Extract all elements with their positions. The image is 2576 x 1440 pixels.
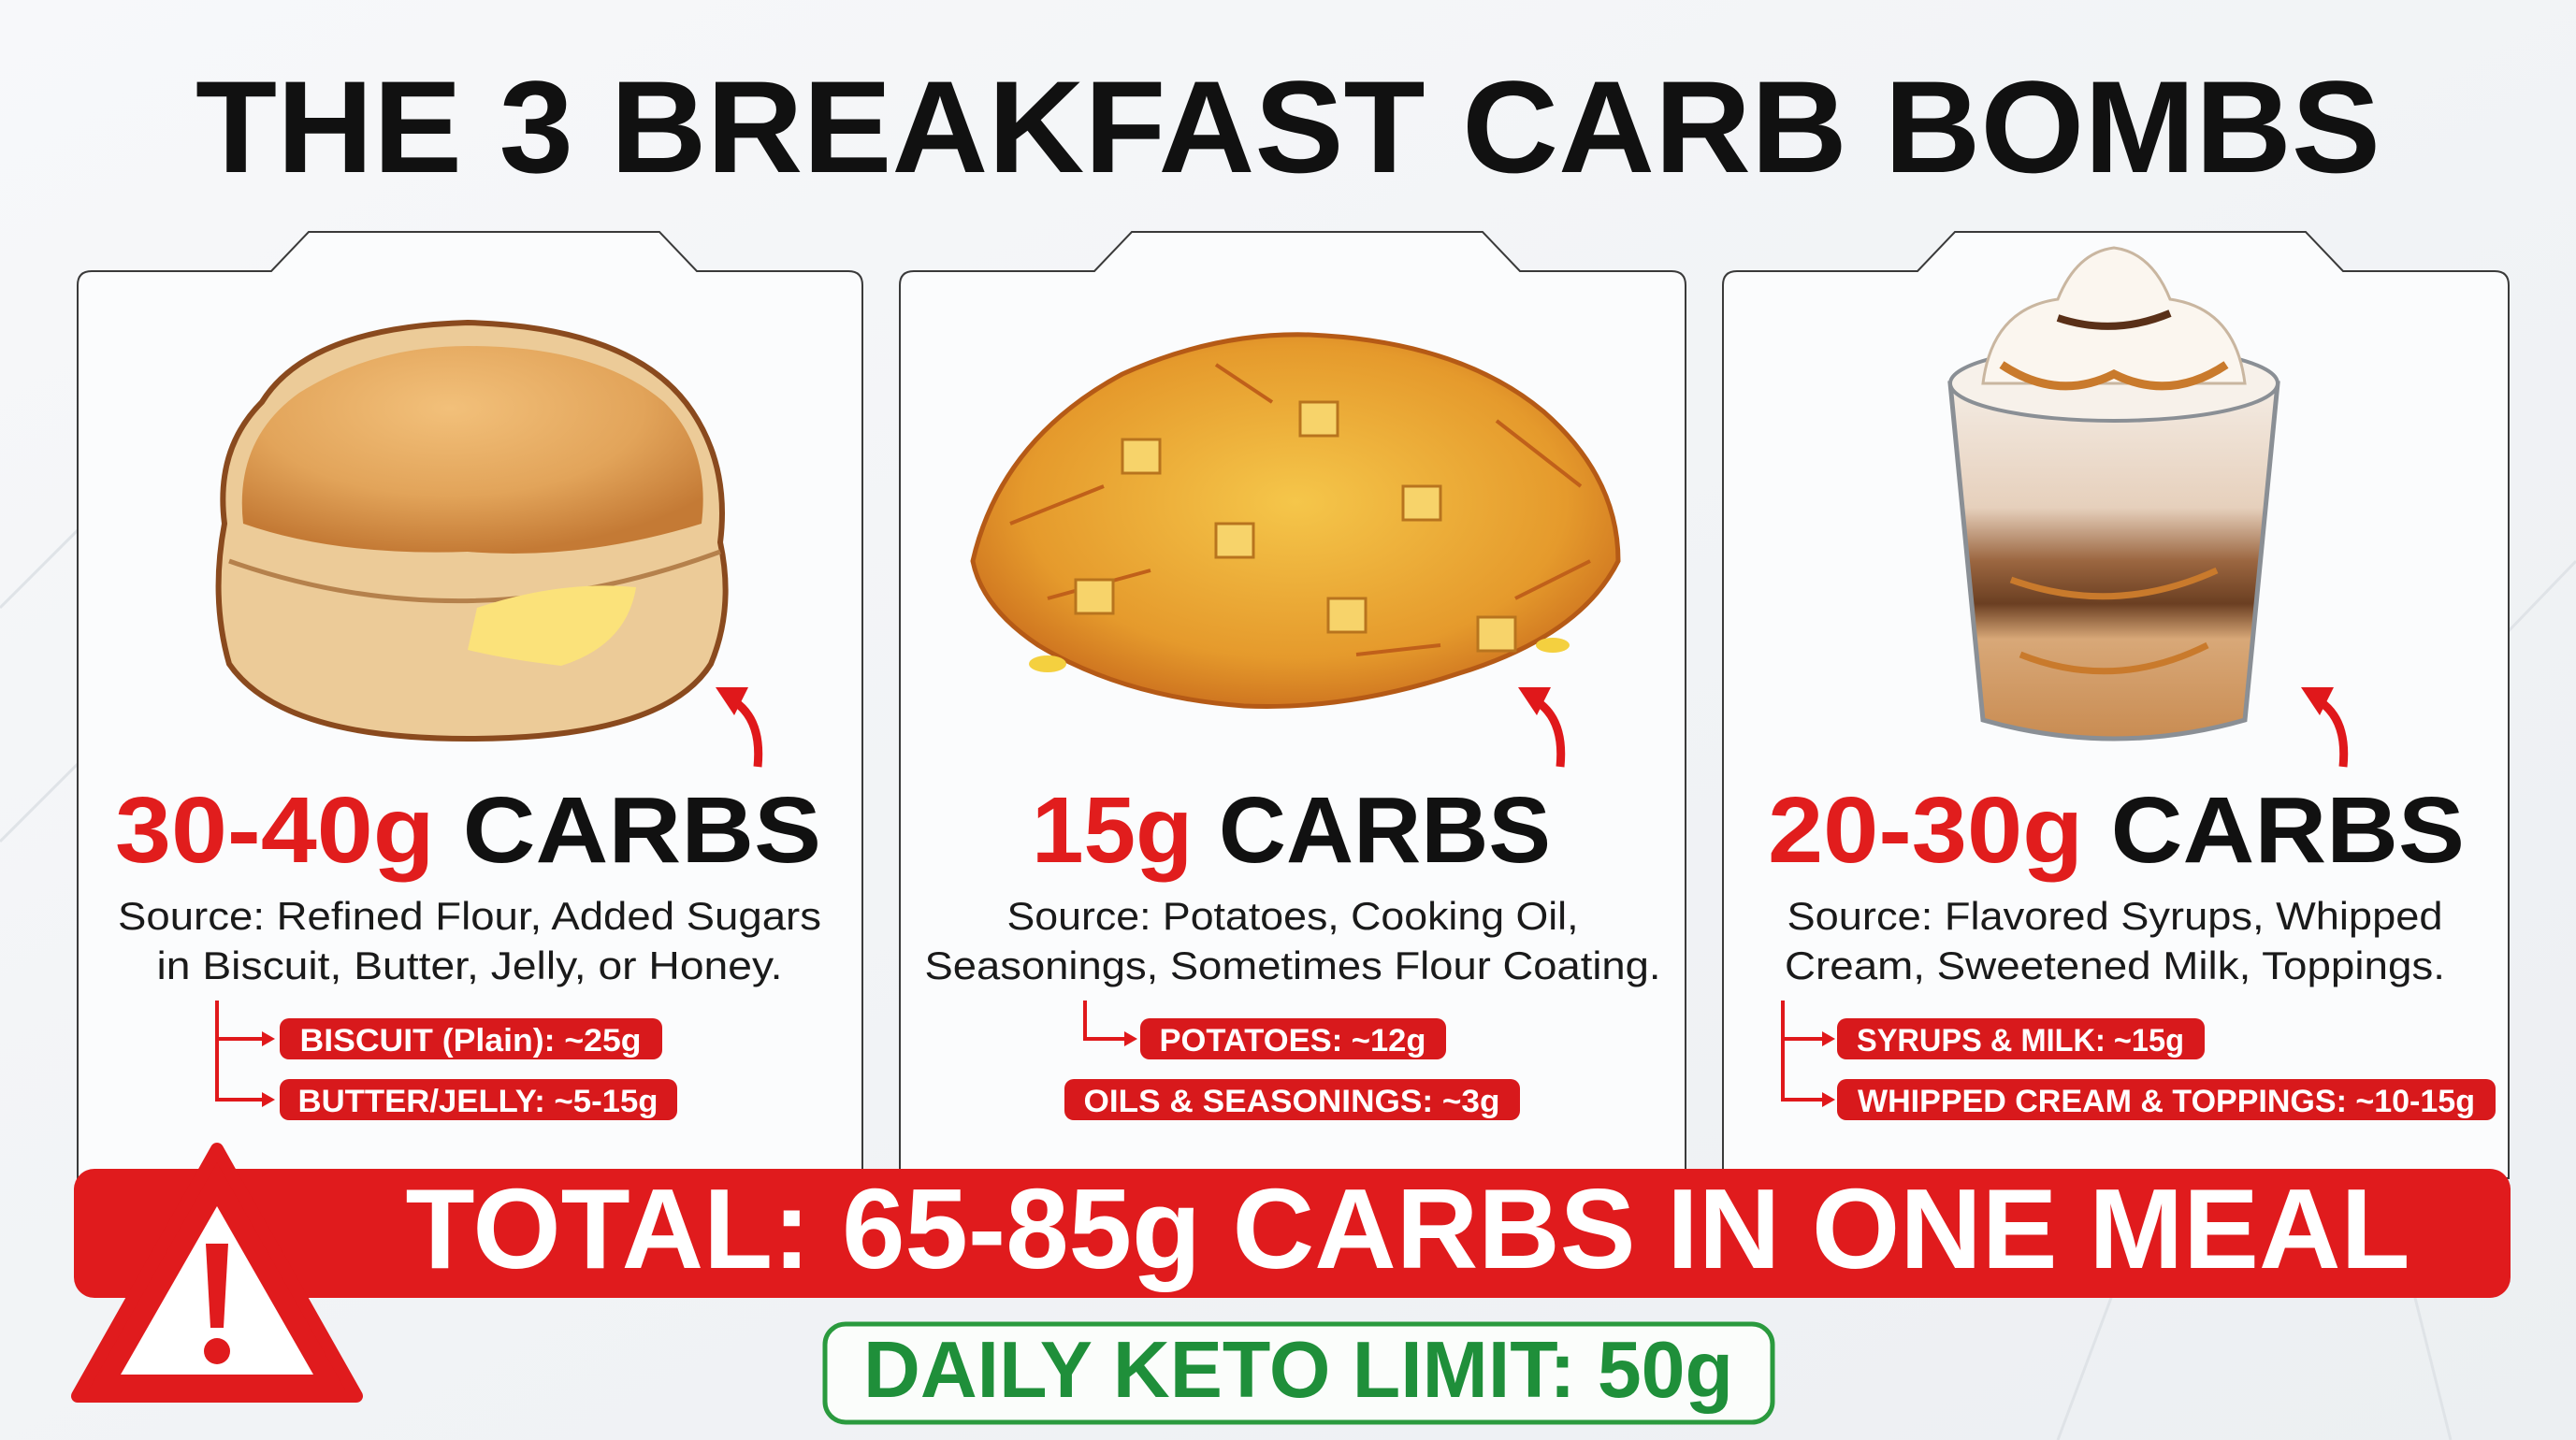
breakdown pills: coffee drink: WHIPPED CREAM & TOPPINGS: ~10-15g [1858,1084,2475,1119]
panel: biscuit [78,232,862,1178]
panel: hash browns [900,232,1686,1178]
source text: hash browns [924,894,1661,987]
breakdown pills: coffee drink: SYRUPS & MILK: ~15g [1857,1023,2184,1058]
source text: hash browns: Seasonings, Sometimes Flour Coating. [924,943,1661,987]
source text: biscuit: in Biscuit, Butter, Jelly, or Honey. [157,943,782,987]
source text: coffee drink: Cream, Sweetened Milk, Toppings. [1785,943,2445,987]
source text: hash browns: Source: Potatoes, Cooking Oil, [1006,894,1579,938]
title: THE 3 BREAKFAST CARB BOMBS [195,53,2381,200]
breakdown pills: biscuit: BISCUIT (Plain): ~25g [299,1023,642,1058]
carbs heading: biscuit: 30-40g CARBS [115,778,821,883]
arrow: biscuit [716,687,759,767]
breakdown pills: hash browns: OILS & SEASONINGS: ~3g [1083,1084,1500,1119]
breakdown pills: biscuit [217,1001,677,1120]
keto limit box: DAILY KETO LIMIT: 50g [863,1326,1733,1415]
source text: coffee drink: Source: Flavored Syrups, Whipped [1787,894,2443,938]
breakdown pills: hash browns [1064,1001,1520,1120]
breakdown pills: hash browns: POTATOES: ~12g [1160,1023,1425,1058]
panel: coffee drink [1723,232,2509,1178]
breakdown pills: coffee drink [1783,1001,2496,1120]
source text: biscuit: Source: Refined Flour, Added Sugars [118,894,821,938]
carbs heading: coffee drink: 20-30g CARBS [1768,778,2465,883]
icon: whipped coffee drink [1950,248,2278,739]
total banner: TOTAL: 65-85g CARBS IN ONE MEAL [406,1165,2410,1292]
icon: warning triangle [78,1149,356,1396]
carbs heading: hash browns: 15g CARBS [1032,778,1551,883]
source text: coffee drink [1785,894,2445,987]
breakdown pills: biscuit: BUTTER/JELLY: ~5-15g [297,1084,658,1119]
source text: biscuit [118,894,821,987]
arrow: hash browns [1518,687,1561,767]
icon: hash browns [973,335,1618,707]
arrow: coffee drink [2301,687,2344,767]
icon: biscuit [219,323,726,739]
